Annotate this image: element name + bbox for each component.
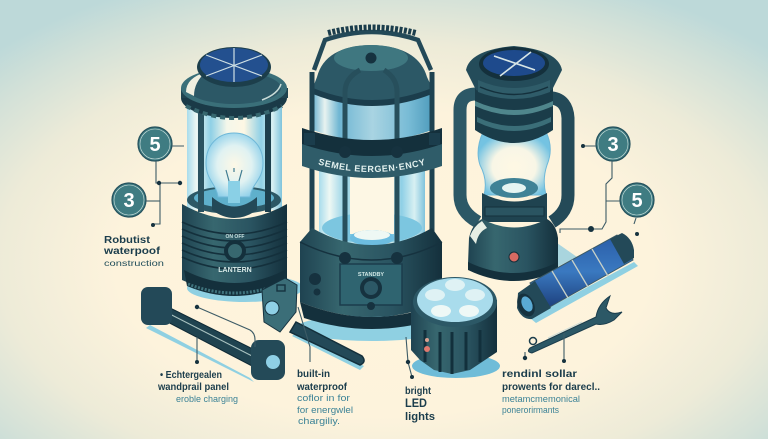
label: wand rail panel: • Echtergealen [160, 370, 222, 381]
solar panel [479, 47, 549, 81]
callout: right 5: 5 [631, 190, 643, 212]
lantern: centre emergency: STANDBY [358, 272, 384, 278]
lantern: left with bulb: LANTERN [218, 267, 252, 274]
lantern: left with bulb [181, 47, 303, 302]
outer posts [312, 72, 432, 235]
label: built-in waterproof [296, 369, 353, 426]
label: robust waterproof construction: construction [104, 258, 164, 268]
lantern: right with handles [460, 46, 577, 281]
label: built-in waterproof: coflor in for [297, 393, 350, 403]
wrench [528, 296, 622, 353]
base [300, 228, 442, 317]
base [468, 219, 558, 275]
label: robust waterproof construction: waterpoof [103, 246, 161, 257]
lantern: left with bulb: ON OFF [226, 234, 244, 240]
label: rendinl sollar: ponerorirmants [502, 405, 559, 415]
upper chamber [313, 85, 432, 141]
inner posts [345, 70, 397, 258]
callout: left 5 [138, 127, 184, 227]
label: built-in waterproof: waterproof [296, 382, 348, 393]
label: wand rail panel: eroble charging [176, 394, 238, 404]
callout: left 5: 5 [149, 134, 161, 156]
label: bright LED lights: bright [405, 386, 432, 397]
clamp camera tool [262, 278, 364, 370]
light bulb [206, 133, 263, 218]
label: rendinl sollar: prowents for darecl.. [502, 382, 600, 393]
label: built-in waterproof: for energwlel [297, 405, 353, 415]
label: bright LED lights [405, 386, 435, 423]
label: robust waterproof construction [103, 235, 164, 268]
label: rendinl sollar [502, 369, 600, 415]
label: bright LED lights: LED [405, 396, 427, 410]
band with label: SEMEL EERGEN·ENCY [318, 158, 424, 172]
cap [181, 78, 287, 118]
callout: left 3 [112, 183, 160, 217]
dome [312, 45, 433, 103]
rail bar tool [141, 287, 285, 382]
LED module [411, 277, 500, 378]
top cap [466, 46, 562, 97]
label: rendinl sollar: metamcmemonical [502, 394, 580, 404]
label: wand rail panel [157, 370, 238, 404]
flashlight [514, 233, 638, 323]
lantern: centre emergency [300, 24, 442, 341]
handle [314, 32, 431, 70]
base [182, 204, 287, 292]
collars [475, 88, 553, 143]
glass chamber [319, 165, 425, 250]
glass globe [478, 132, 550, 195]
solar panel [200, 48, 268, 82]
label: built-in waterproof: chargiliy. [298, 416, 340, 426]
band with label [302, 128, 442, 178]
neck [482, 193, 547, 222]
callout: right 3: 3 [607, 134, 619, 156]
label: bright LED lights: lights [405, 411, 435, 423]
leader lines [195, 305, 566, 379]
label: wand rail panel: wandprail panel [157, 382, 229, 393]
handles [460, 94, 478, 222]
callout: right 3 [560, 127, 630, 233]
label: robust waterproof construction: Robutist [104, 235, 151, 246]
label: built-in waterproof: built-in [297, 369, 330, 380]
callout: left 3: 3 [123, 190, 135, 212]
label: rendinl sollar: rendinl sollar [502, 369, 577, 380]
callout: right 5 [606, 183, 654, 236]
dial [224, 240, 246, 262]
glass cylinder [187, 100, 282, 210]
